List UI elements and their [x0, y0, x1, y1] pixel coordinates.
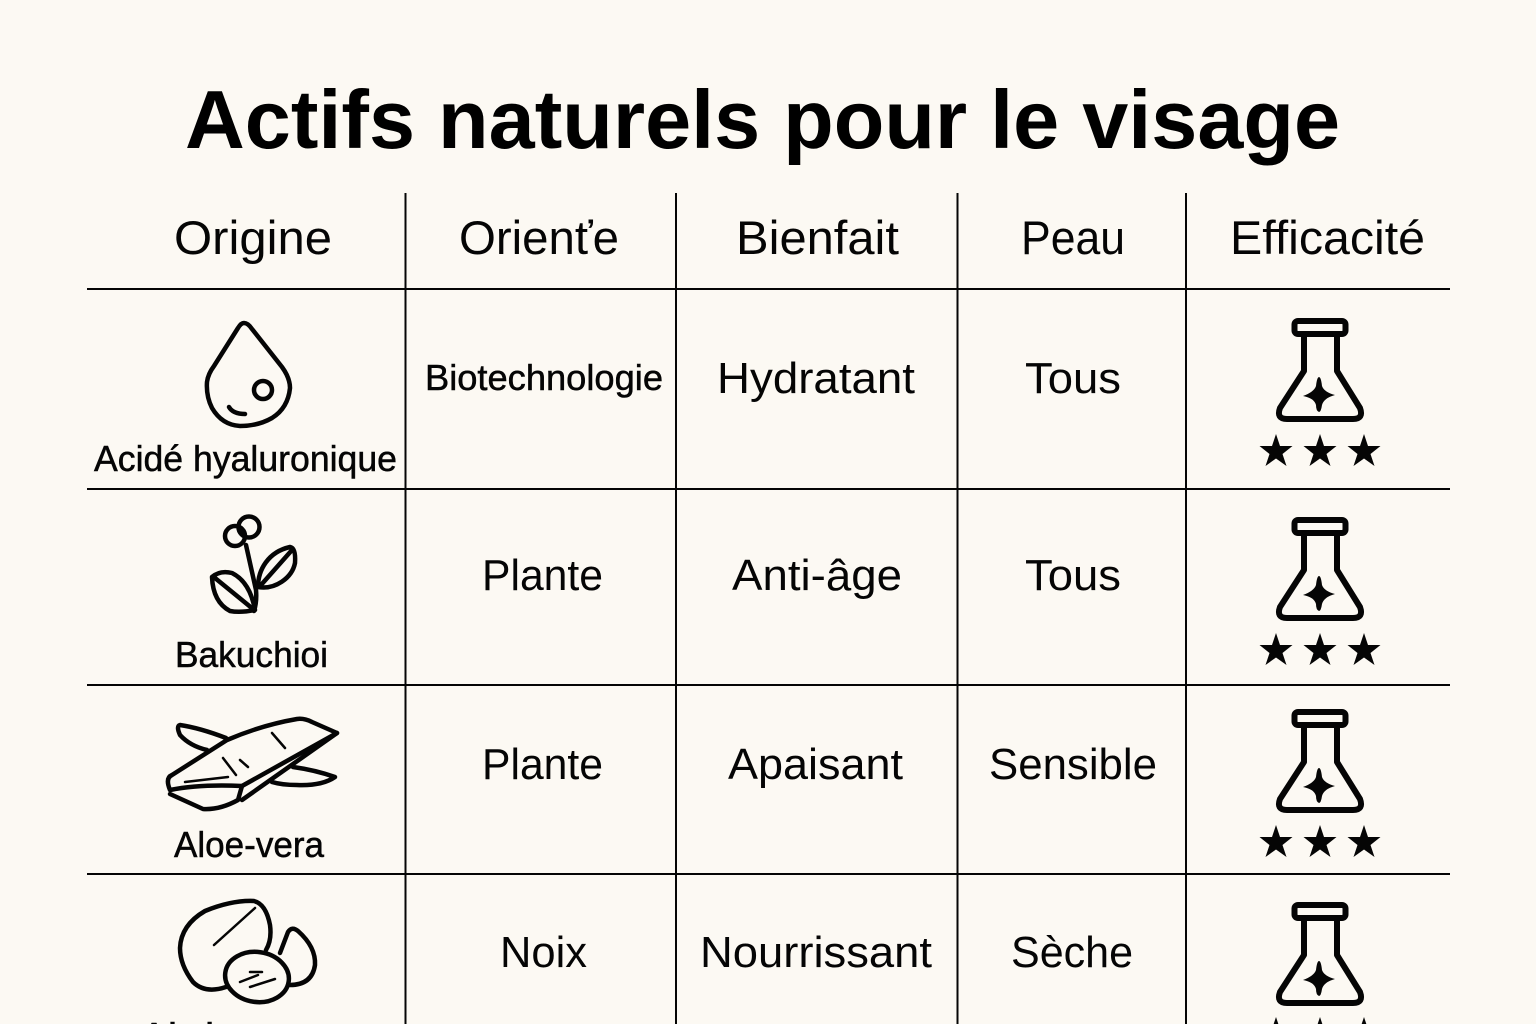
icon: flask	[1279, 712, 1361, 810]
icon: aloe leaf	[168, 719, 337, 809]
icon: water drop	[207, 323, 290, 426]
header: Origine: Origine	[174, 211, 332, 264]
cell: Plante: Plante	[482, 551, 603, 600]
cell: Hydratant: Hydratant	[717, 354, 915, 403]
rating: three stars (clipped)	[1260, 1017, 1380, 1024]
cell: Nourrissant: Nourrissant	[700, 928, 932, 977]
cell: Anti-âge: Anti-âge	[732, 551, 902, 600]
cell: Tous: Tous	[1025, 354, 1121, 403]
row 2: Bakuchiol	[175, 516, 1380, 675]
title: Actifs naturels pour le visage	[185, 73, 1340, 166]
rating: three stars	[1260, 434, 1380, 466]
label: Aloe-vera: Aloe-vera	[174, 824, 325, 865]
icon: flask	[1279, 905, 1361, 1003]
icon: flask	[1279, 520, 1361, 618]
icon: nuts	[180, 901, 315, 1006]
table header	[174, 211, 1425, 264]
cell: Tous: Tous	[1025, 551, 1121, 600]
header: Bienfait: Bienfait	[736, 211, 899, 264]
cell: Sèche: Sèche	[1011, 928, 1133, 977]
row 1: Acide hyaluronique	[94, 321, 1380, 479]
rating: three stars	[1260, 633, 1380, 665]
cell: Noix: Noix	[500, 928, 587, 977]
cell: Apaisant: Apaisant	[728, 740, 903, 789]
header: Efficacité: Efficacité	[1230, 211, 1425, 264]
cell: Sensible: Sensible	[989, 740, 1157, 789]
row 4: nuts	[140, 901, 1380, 1024]
label: Acidé hyaluronique: Acidé hyaluronique	[94, 438, 397, 479]
cell: Plante: Plante	[482, 740, 603, 789]
header: Orienté: Orienťe	[459, 211, 619, 264]
cell: Biotechnologie: Biotechnologie	[425, 357, 663, 398]
rating: three stars	[1260, 825, 1380, 857]
label: Bakuchioi: Bakuchioi	[175, 634, 328, 675]
row 3: Aloe-vera	[168, 712, 1381, 865]
icon: flask	[1279, 321, 1361, 419]
header: Peau: Peau	[1021, 211, 1125, 264]
icon: plant	[212, 516, 295, 612]
